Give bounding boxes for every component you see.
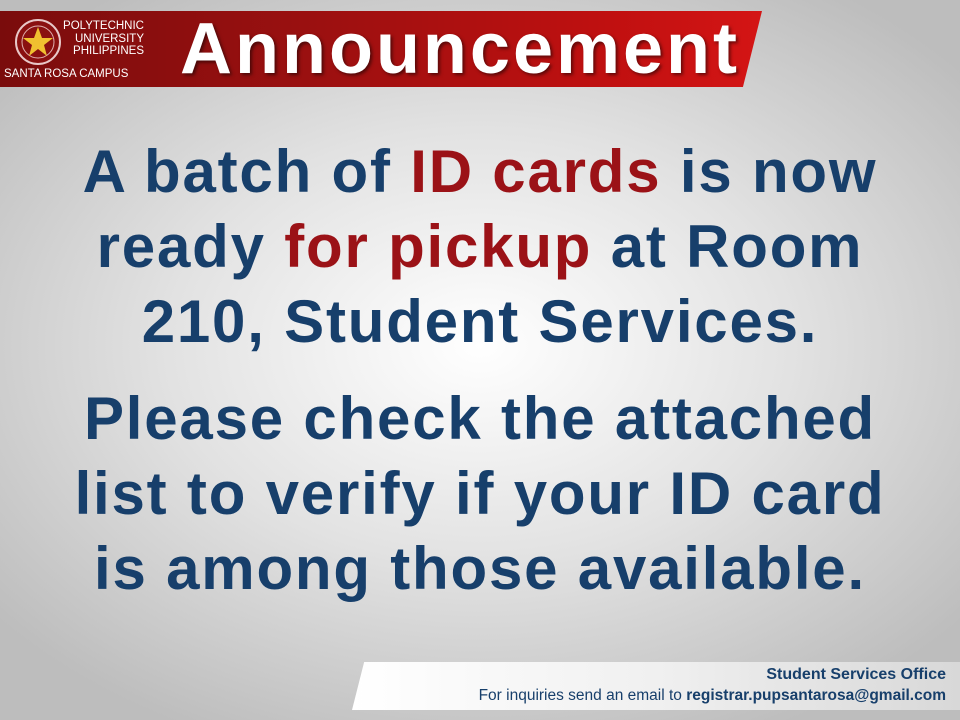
- message paragraph 2: Please check the attached: [84, 385, 876, 452]
- inquiry line: For inquiries send an email to registrar.pupsantarosa@gmail.com: [479, 687, 946, 704]
- university name: POLYTECHNIC: [63, 20, 144, 32]
- message paragraph 2: list to verify if your ID card: [75, 460, 885, 527]
- header banner: [0, 11, 762, 87]
- footer contact panel: [352, 662, 960, 710]
- message paragraph 2: is among those available.: [94, 535, 866, 602]
- campus name: SANTA ROSA CAMPUS: [4, 68, 128, 80]
- message paragraph 2: [75, 385, 885, 602]
- university name: [64, 20, 144, 54]
- message paragraph 1: ready for pickup at Room: [97, 213, 863, 280]
- message paragraph 1: 210, Student Services.: [142, 288, 818, 355]
- university name: UNIVERSITY: [75, 32, 144, 44]
- message paragraph 1: [83, 138, 877, 355]
- title: Announcement: [180, 9, 740, 89]
- logo seal: [15, 19, 61, 65]
- university name: PHILIPPINES: [73, 45, 144, 57]
- message paragraph 1: A batch of ID cards is now: [83, 138, 877, 205]
- office name: Student Services Office: [766, 666, 946, 683]
